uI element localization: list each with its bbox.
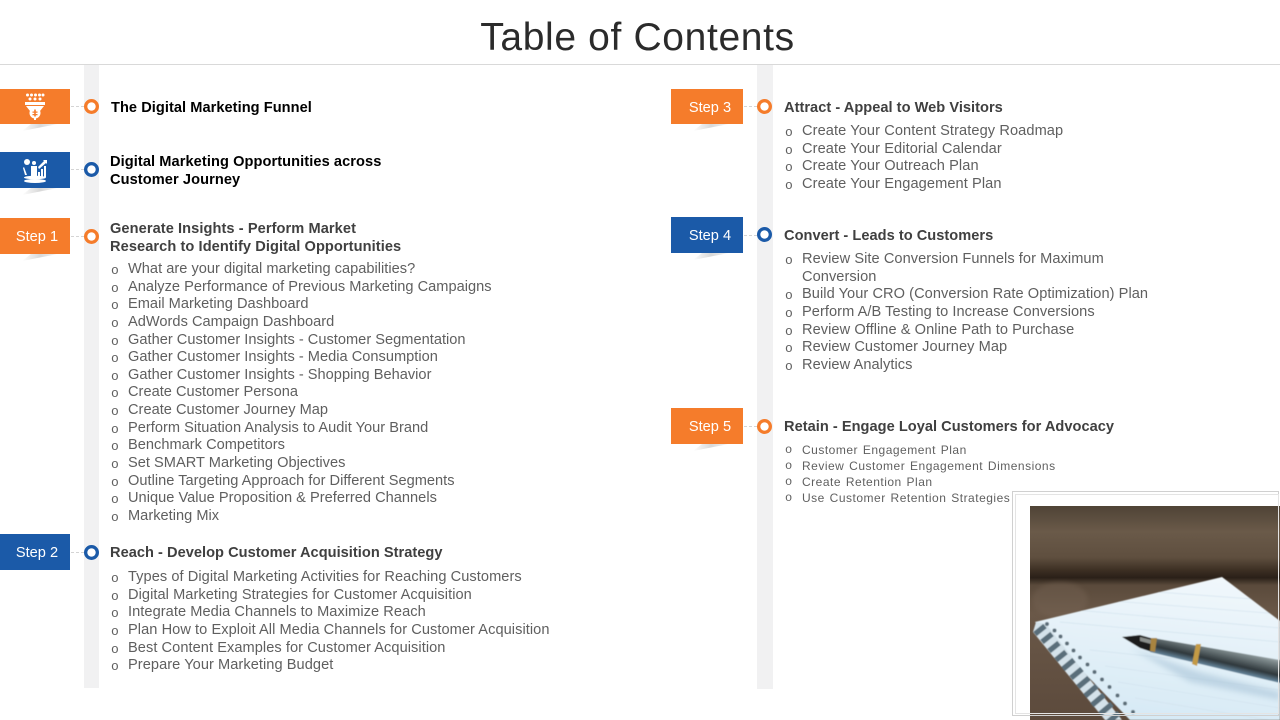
list: Integrate Media Channels to Maximize Reach [128,604,426,620]
left timeline rail [84,65,99,688]
entry: Step 2 [0,534,550,673]
list: Conversion [802,269,876,285]
pen [1122,635,1154,652]
heading [110,154,381,188]
heading [110,221,401,255]
step 4 tag [671,217,743,253]
entry: Step 1 [0,218,492,524]
step 2 tag [0,534,70,570]
photo: notebook and fountain pen [1012,491,1280,720]
icon: growth chart [0,152,70,188]
list [786,443,1056,505]
list: Create Retention Plan [802,475,933,489]
list: Create Your Outreach Plan [802,158,979,174]
list: Review Analytics [802,357,912,373]
step 4 tag: Step 4 [689,228,731,244]
list: Gather Customer Insights - Shopping Behavior [128,367,431,383]
icon: funnel [0,89,70,124]
list: Marketing Mix [128,508,219,524]
list: Review Customer Journey Map [802,339,1007,355]
list [112,569,550,673]
heading: Attract - Appeal to Web Visitors [784,100,1003,116]
list: Gather Customer Insights - Customer Segmentation [128,332,466,348]
step 2 tag: Step 2 [16,545,58,561]
entry: Step 5 [671,408,1114,505]
list: Create Customer Journey Map [128,402,328,418]
heading: Generate Insights - Perform Market [110,221,356,237]
frame [1012,492,1278,716]
step 3 tag [671,89,743,124]
pen shadow [1138,651,1280,700]
list [786,123,1063,192]
step 1 tag [0,218,70,254]
heading: Convert - Leads to Customers [784,228,993,244]
list: Plan How to Exploit All Media Channels for Customer Acquisition [128,622,550,638]
notebook page [1035,577,1280,720]
step 5 tag: Step 5 [689,419,731,435]
list [786,251,1148,373]
list: Unique Value Proposition & Preferred Channels [128,490,437,506]
list: Build Your CRO (Conversion Rate Optimization) Plan [802,286,1148,302]
list: Customer Engagement Plan [802,443,967,457]
list: Email Marketing Dashboard [128,296,309,312]
list: AdWords Campaign Dashboard [128,314,334,330]
entry: Step 4 [671,217,1148,373]
list: Outline Targeting Approach for Different Segments [128,473,455,489]
list: Digital Marketing Strategies for Customer Acquisition [128,587,472,603]
list: Benchmark Competitors [128,437,285,453]
heading: The Digital Marketing Funnel [111,100,312,116]
list: Perform Situation Analysis to Audit Your Brand [128,420,428,436]
list: Types of Digital Marketing Activities for Reaching Customers [128,569,522,585]
list: Prepare Your Marketing Budget [128,657,333,673]
list: Perform A/B Testing to Increase Conversions [802,304,1095,320]
list: Create Your Content Strategy Roadmap [802,123,1063,139]
list: Use Customer Retention Strategies [802,491,1010,505]
step 5 tag [671,408,743,444]
entry: Step 3 [671,89,1063,192]
list: Create Your Editorial Calendar [802,141,1002,157]
heading: Retain - Engage Loyal Customers for Advocacy [784,419,1114,435]
list: Create Customer Persona [128,384,298,400]
list: Analyze Performance of Previous Marketing Campaigns [128,279,492,295]
list: Create Your Engagement Plan [802,176,1002,192]
list: Gather Customer Insights - Media Consumption [128,349,438,365]
list: Set SMART Marketing Objectives [128,455,345,471]
list: Review Site Conversion Funnels for Maximum [802,251,1104,267]
step 3 tag: Step 3 [689,100,731,116]
list: Best Content Examples for Customer Acquisition [128,640,445,656]
step 1 tag: Step 1 [16,229,58,245]
list: What are your digital marketing capabilities? [128,261,415,277]
heading: Reach - Develop Customer Acquisition Strategy [110,545,442,561]
list: Review Customer Engagement Dimensions [802,459,1056,473]
entry: The Digital Marketing Funnel [0,89,312,130]
title: Table of Contents [480,16,795,59]
spiral binding [1035,626,1119,720]
heading: Digital Marketing Opportunities across [110,154,381,170]
right timeline rail [757,65,773,689]
list [112,261,492,524]
heading: Customer Journey [110,172,240,188]
list: Review Offline & Online Path to Purchase [802,322,1074,338]
heading: Research to Identify Digital Opportunities [110,239,401,255]
entry: Digital Marketing Opportunities [0,152,381,194]
